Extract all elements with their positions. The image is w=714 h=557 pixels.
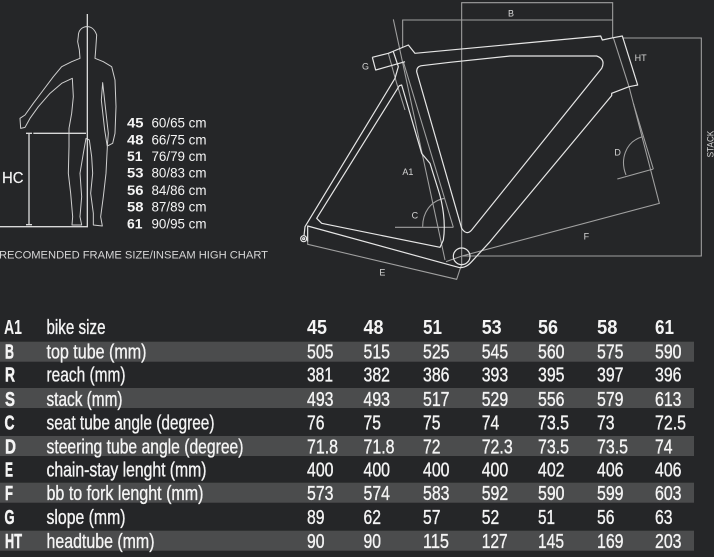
table row: bb to fork length: bb to fork lenght (mm) (46, 483, 204, 505)
table row: steering tube angle: 73.5 (538, 436, 569, 458)
table row: seat tube angle: C (4, 412, 14, 434)
table row: bike size: 45 (307, 317, 327, 339)
table row: reach: 396 (655, 365, 682, 387)
table row: bike size: A1 (4, 317, 22, 339)
table row: stack: S (5, 389, 15, 411)
table row: top tube: 575 (597, 342, 624, 364)
table row: chain-stay length: 400 (482, 460, 508, 482)
table row: headtube: 90 (364, 531, 381, 553)
table row: reach: reach (mm) (46, 365, 126, 387)
inseam size list: 87/89 cm (152, 199, 206, 215)
table row: top tube: 560 (538, 342, 564, 364)
table row: seat tube angle: 73.5 (538, 412, 569, 434)
table row: bb to fork length: F (5, 483, 13, 505)
table row: headtube: 115 (423, 531, 449, 553)
table row: steering tube angle (5, 436, 672, 458)
table row: bb to fork length: 573 (307, 483, 334, 505)
table row: slope: 62 (364, 507, 381, 529)
table row: bike size: 53 (482, 317, 502, 339)
diagram letters: HT (635, 53, 647, 63)
table row: bb to fork length: 574 (364, 483, 390, 505)
table row: headtube: 203 (655, 531, 682, 553)
table row: top tube: 545 (482, 342, 508, 364)
inseam size list: 60/65 cm (152, 114, 206, 130)
table row: chain-stay length: E (5, 460, 13, 482)
table row: stack (5, 389, 682, 411)
table row: stack: 613 (655, 389, 682, 411)
table row: top tube (5, 342, 682, 364)
body outline (20, 27, 116, 226)
bike frame geometry diagram (301, 3, 714, 279)
table row: headtube (5, 531, 682, 553)
table row: stack: 579 (597, 389, 624, 411)
inseam size list: 51 (127, 148, 143, 164)
table row: bike size: 51 (423, 317, 442, 339)
table row: top tube: top tube (mm) (46, 342, 146, 364)
table row: headtube: HT (5, 531, 22, 553)
table row: reach: 382 (364, 365, 390, 387)
inseam size list: 58 (127, 199, 144, 215)
table row: bb to fork length: 603 (655, 483, 682, 505)
inseam size list: 48 (127, 131, 144, 147)
table row: chain-stay length: 400 (423, 460, 450, 482)
rider figure with inseam measure (0, 14, 116, 227)
table row: reach: 395 (538, 365, 564, 387)
diagram letters (362, 8, 714, 278)
table row: top tube: 590 (655, 342, 682, 364)
table row: chain-stay length: 400 (364, 460, 390, 482)
diagram letters: E (379, 268, 385, 278)
inseam size list: 66/75 cm (152, 131, 206, 147)
table row: steering tube angle: 71.8 (364, 436, 394, 458)
table row: top tube: 515 (364, 342, 390, 364)
inseam size list: 84/86 cm (152, 182, 206, 198)
table row: stack: 493 (307, 389, 334, 411)
table row: seat tube angle: 72.5 (655, 412, 686, 434)
table row: chain-stay length: chain-stay lenght (mm) (46, 460, 206, 482)
diagram letters: D (614, 148, 621, 158)
diagram letters: G (362, 62, 369, 72)
table row: reach: 397 (597, 365, 624, 387)
table row: reach: 381 (307, 365, 333, 387)
table row: seat tube angle: 75 (364, 412, 381, 434)
table row: seat tube angle: seat tube angle (degree) (46, 412, 214, 434)
table striped row bands (0, 342, 694, 551)
table row: chain-stay length: 400 (307, 460, 334, 482)
height and ground lines (0, 14, 87, 227)
table row: reach: 386 (423, 365, 450, 387)
table row: bb to fork length: 583 (423, 483, 450, 505)
table row: headtube: headtube (mm) (46, 531, 154, 553)
table row: steering tube angle: D (5, 436, 16, 458)
table row: bike size: 48 (364, 317, 384, 339)
table row: bb to fork length: 599 (597, 483, 624, 505)
inseam size list (127, 114, 206, 231)
table row: bb to fork length: 592 (482, 483, 508, 505)
table row: chain-stay length: 406 (655, 460, 682, 482)
inseam size list: 90/95 cm (152, 215, 206, 231)
table row: headtube: 169 (597, 531, 624, 553)
table row: chain-stay length: 402 (538, 460, 564, 482)
table row: stack: 517 (423, 389, 450, 411)
table row: reach: R (5, 365, 15, 387)
table row: slope: 89 (307, 507, 324, 529)
table row: stack: 529 (482, 389, 508, 411)
table row: slope: 57 (423, 507, 440, 529)
table row: reach (5, 365, 682, 387)
table row: steering tube angle: steering tube angle (degree) (46, 436, 244, 458)
HC label: HC (2, 170, 24, 187)
table row: seat tube angle: 76 (307, 412, 324, 434)
table row: bb to fork length (5, 483, 682, 505)
table row: bike size: 61 (655, 317, 674, 339)
table row: stack: 556 (538, 389, 564, 411)
table row: stack: 493 (364, 389, 390, 411)
inseam size list: 76/79 cm (152, 148, 206, 164)
chart caption: RECOMENDED FRAME SIZE/INSEAM HIGH CHART (0, 250, 268, 262)
diagram letters: A1 (402, 167, 413, 177)
table row: slope (4, 507, 672, 529)
table row: top tube: B (5, 342, 14, 364)
table row: seat tube angle: 75 (423, 412, 440, 434)
table row: seat tube angle: 73 (597, 412, 614, 434)
table row: reach: 393 (482, 365, 508, 387)
table row: headtube: 90 (307, 531, 324, 553)
table row: bike size: bike size (46, 317, 106, 339)
table row: seat tube angle (4, 412, 686, 434)
table row: headtube: 145 (538, 531, 564, 553)
table row: steering tube angle: 72 (423, 436, 440, 458)
table row: slope: slope (mm) (46, 507, 126, 529)
diagram letters: B (508, 8, 514, 18)
table row: slope: 51 (538, 507, 555, 529)
table row: slope: 63 (655, 507, 672, 529)
table row: chain-stay length: 406 (597, 460, 624, 482)
frame outline (301, 36, 638, 268)
table row: steering tube angle: 73.5 (597, 436, 628, 458)
table row: headtube: 127 (482, 531, 508, 553)
table row: stack: stack (mm) (46, 389, 122, 411)
table row: slope: 56 (597, 507, 614, 529)
dimension lines (308, 3, 701, 279)
table row: top tube: 525 (423, 342, 450, 364)
inseam size list: 61 (127, 215, 143, 231)
inseam size list: 80/83 cm (152, 165, 206, 181)
table row: slope: G (4, 507, 14, 529)
table row: steering tube angle: 71.8 (307, 436, 338, 458)
table row: steering tube angle: 74 (655, 436, 672, 458)
table row: bike size (4, 317, 674, 339)
inseam size list: 45 (127, 114, 144, 130)
table row: seat tube angle: 74 (482, 412, 499, 434)
diagram letters: F (584, 232, 590, 242)
table row: bike size: 56 (538, 317, 558, 339)
table row: slope: 52 (482, 507, 499, 529)
table row: bike size: 58 (597, 317, 618, 339)
table row: chain-stay length (5, 460, 682, 482)
table row: steering tube angle: 72.3 (482, 436, 513, 458)
table row: top tube: 505 (307, 342, 334, 364)
inseam size list: 56 (127, 182, 144, 198)
inseam size list: 53 (127, 165, 144, 181)
table row: bb to fork length: 590 (538, 483, 564, 505)
diagram letters: C (412, 210, 419, 220)
